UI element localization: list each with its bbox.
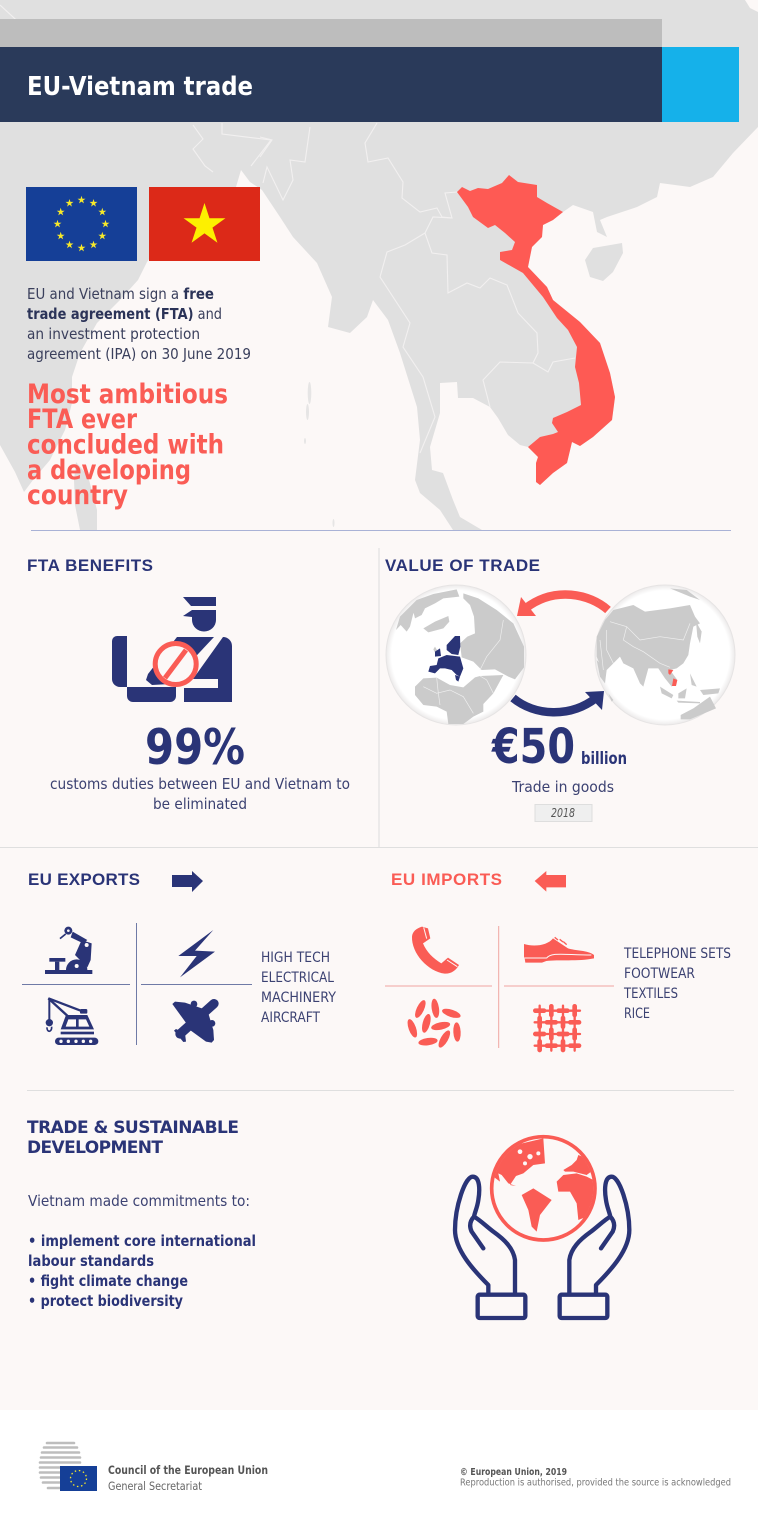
panel: EU exports: [22, 870, 336, 1045]
text: commitments: Vietnam made commitments to:: [28, 1192, 250, 1210]
arrow: EU to Vietnam: [513, 691, 604, 712]
intro text: an investment protection: [27, 325, 200, 343]
headline callout: Most ambitious: [27, 379, 228, 410]
icon: telephone: [412, 927, 459, 974]
icon: crane: [46, 998, 98, 1045]
heading: EU exports: EU EXPORTS: [28, 870, 140, 889]
title banner: [0, 19, 739, 122]
heading: FTA benefits: FTA BENEFITS: [27, 556, 153, 575]
icon: customs officer with prohibition sign: [112, 597, 232, 702]
heading: trade and sustainable development: [27, 1118, 239, 1158]
text: commitments: • protect biodiversity: [28, 1292, 183, 1310]
icon: rice grains: [406, 998, 462, 1049]
globe: Europe: [386, 585, 526, 725]
icon: airplane: [172, 1001, 215, 1043]
icon: shoe: [524, 937, 594, 963]
intro text: trade agreement (FTA) and: [27, 305, 222, 323]
logo: Council of the EU: [40, 1443, 97, 1491]
text: Council of the EU: General Secretariat: [108, 1479, 202, 1493]
text: export categories: ELECTRICAL: [261, 970, 334, 986]
panel: trade and sustainable development: [27, 1118, 629, 1318]
arrow: exports: [172, 871, 203, 892]
intro text: [27, 285, 251, 363]
icon: textile weave: [535, 1006, 580, 1051]
stat: 99%: 99%: [145, 719, 245, 776]
icon: lightning bolt: [178, 930, 215, 977]
text: trade in goods: Trade in goods: [511, 778, 614, 796]
text: copyright: © European Union, 2019: [460, 1467, 567, 1478]
heading: trade and sustainable development: DEVELOPMENT: [27, 1138, 163, 1158]
arrow: imports: [535, 871, 566, 892]
text: commitments: labour standards: [28, 1252, 154, 1270]
icon: robot arm: [45, 927, 92, 974]
text: commitments: • fight climate change: [28, 1272, 188, 1290]
headline callout: [27, 379, 228, 511]
text: Council of the EU: [108, 1463, 268, 1493]
text: customs duties: customs duties between EU and Vietnam to: [50, 775, 350, 793]
stat: 50 billion euro: €50: [491, 719, 575, 775]
island: Sri Lanka: [74, 462, 97, 530]
text: Council of the EU: Council of the European Union: [108, 1463, 268, 1477]
text: commitments: • implement core international: [28, 1232, 256, 1250]
arrow: Vietnam to EU: [517, 595, 608, 616]
headline callout: country: [27, 480, 128, 511]
panel: FTA benefits: [27, 556, 350, 813]
island: Hainan: [585, 243, 623, 281]
icon: hands holding globe: [455, 1137, 629, 1318]
text: import categories: TELEPHONE SETS: [623, 946, 731, 962]
text: export categories: [261, 950, 336, 1026]
globe: Asia: [595, 585, 735, 725]
Vietnam highlighted: [457, 175, 615, 485]
heading: trade and sustainable development: TRADE & SUSTAINABLE: [27, 1118, 239, 1138]
year tag: 2018: [551, 806, 575, 820]
text: copyright: [460, 1467, 731, 1488]
heading: EU imports: EU IMPORTS: [391, 870, 502, 889]
headline callout: a developing: [27, 455, 191, 486]
map of South-East Asia: [0, 0, 758, 530]
text: export categories: HIGH TECH: [261, 950, 330, 966]
text: import categories: RICE: [624, 1006, 650, 1022]
text: export categories: MACHINERY: [261, 990, 336, 1006]
text: import categories: [623, 946, 731, 1022]
text: customs duties: be eliminated: [153, 795, 247, 813]
panel: value of trade: [385, 556, 735, 822]
text: commitments: [28, 1192, 256, 1310]
text: customs duties: [50, 775, 350, 813]
stat: 50 billion euro: billion: [581, 749, 627, 769]
year tag: [535, 804, 592, 822]
corner sea: [745, 0, 758, 12]
intro text: EU and Vietnam sign a free: [27, 285, 214, 303]
intro text: agreement (IPA) on 30 June 2019: [27, 345, 251, 363]
panel: EU imports: [385, 870, 731, 1051]
headline callout: FTA ever: [27, 404, 137, 435]
heading: value of trade: VALUE OF TRADE: [385, 556, 540, 575]
country borders: [0, 5, 575, 453]
Vietnam flag: [149, 187, 260, 261]
EU flag: [26, 187, 137, 261]
footer: [0, 1410, 758, 1533]
title banner: EU-Vietnam trade: [27, 72, 253, 102]
text: export categories: AIRCRAFT: [261, 1010, 320, 1026]
text: import categories: FOOTWEAR: [624, 966, 695, 982]
islands: Andaman: [304, 382, 334, 527]
text: import categories: TEXTILES: [623, 986, 678, 1002]
headline callout: concluded with: [27, 430, 224, 460]
